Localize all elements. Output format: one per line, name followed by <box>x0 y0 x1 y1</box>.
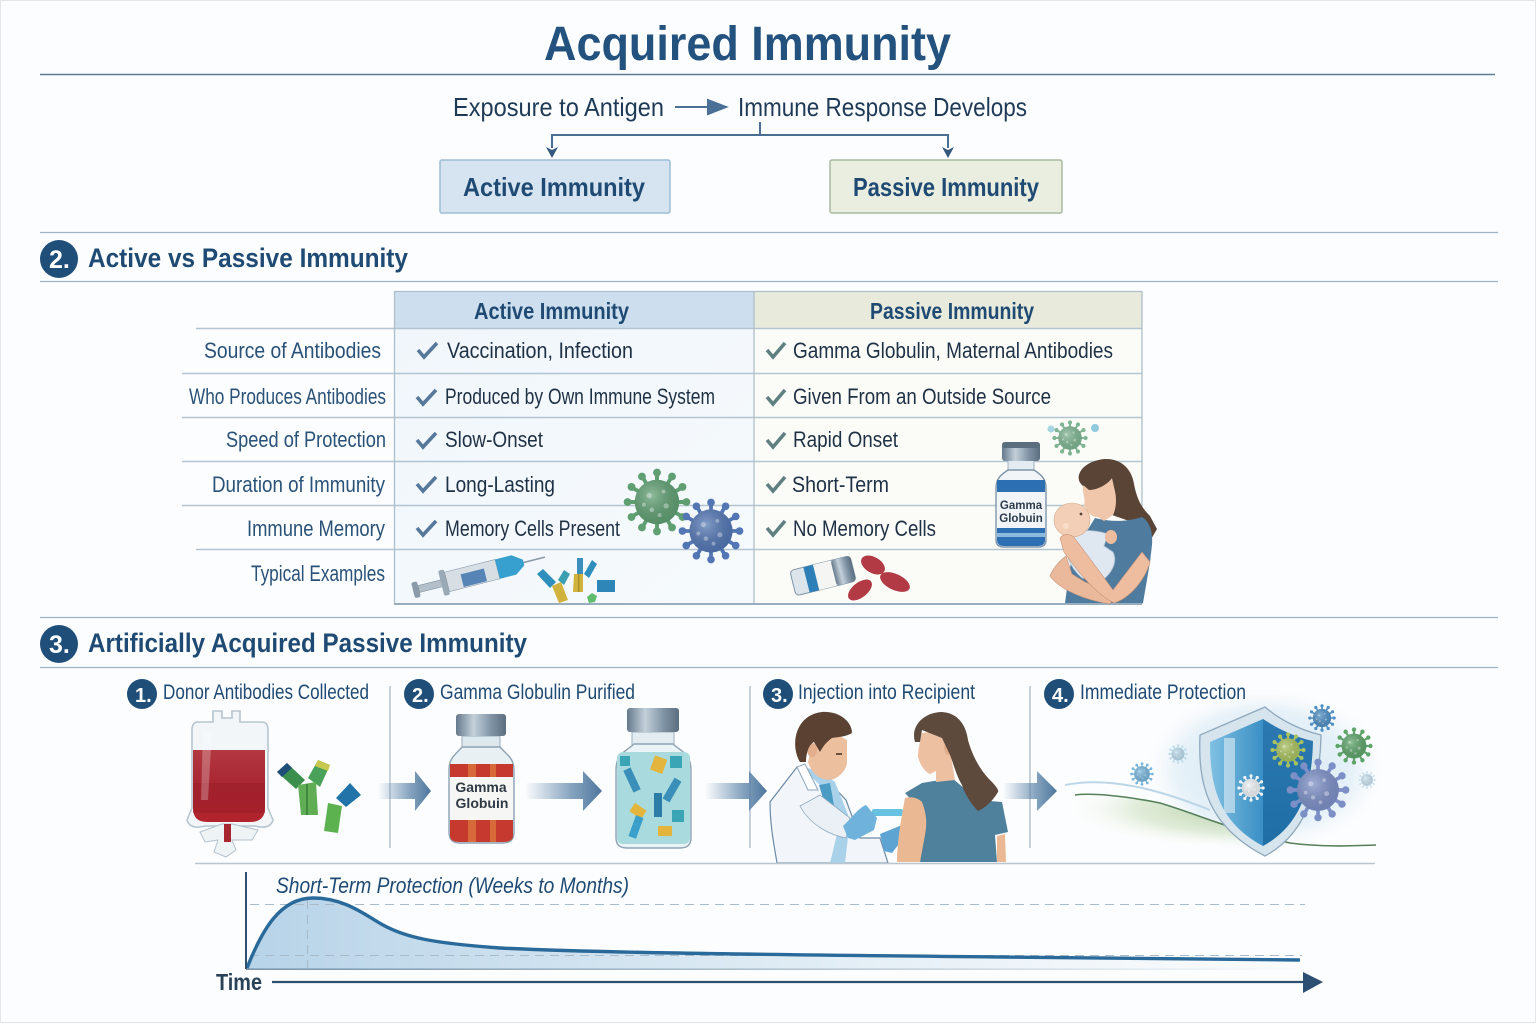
arrow: purified <box>525 771 602 811</box>
row labels <box>189 338 386 586</box>
illustration: recipient woman <box>897 712 1008 862</box>
arrow: step 1 to 2 <box>378 771 431 811</box>
step 3 label: Injection into Recipient <box>798 681 975 704</box>
icon: gamma globulin vial <box>996 442 1046 547</box>
step 2 label: Gamma Globulin Purified <box>440 681 635 704</box>
face <box>1083 477 1116 521</box>
flow: exposure to immune response: Exposure to Antigen <box>453 92 664 122</box>
active immunity cells <box>417 338 715 541</box>
shirt and tie <box>800 766 850 863</box>
row labels: Speed of Protection <box>226 427 386 452</box>
hair back <box>1079 459 1157 541</box>
background cloud <box>1140 685 1390 855</box>
arrow: step 3 to 4 <box>1003 771 1057 811</box>
icon: gamma globulin vial: Globuin <box>999 513 1043 525</box>
active immunity cells: Memory Cells Present <box>445 516 620 541</box>
hair <box>795 712 852 762</box>
head <box>808 732 847 780</box>
icon: gamma globulin bottle: Globuin <box>456 795 508 811</box>
heading: section 2: Active vs Passive Immunity <box>88 243 408 273</box>
icon: purified jar <box>616 708 691 848</box>
passive immunity cells <box>767 338 1113 541</box>
table header: active: Active Immunity <box>474 298 629 324</box>
row labels: Who Produces Antibodies <box>189 384 386 409</box>
hair <box>914 712 998 811</box>
row labels: Typical Examples <box>251 561 385 586</box>
icon: gamma globulin bottle: Gamma <box>455 779 507 795</box>
connector arrows to immunity boxes <box>552 122 948 148</box>
table header: passive: Passive Immunity <box>870 298 1034 324</box>
arrow: exposure to response <box>675 100 726 114</box>
sleeve <box>800 795 850 838</box>
icon: blood bag <box>187 711 273 857</box>
step 3 label: 3. <box>771 685 788 707</box>
step 3 label <box>763 679 975 709</box>
chart label: Short-Term Protection (Weeks to Months) <box>276 873 629 898</box>
shield body <box>1200 707 1321 856</box>
time arrow <box>272 981 1305 983</box>
mother's near arm <box>1060 534 1150 603</box>
illustration: immediate protection shield <box>1062 685 1390 864</box>
heading: section 2: 2. <box>49 246 70 274</box>
active immunity cells: Produced by Own Immune System <box>445 384 715 409</box>
heading: section 2 <box>40 240 408 278</box>
heading: section 3: Artificially Acquired Passive Immunity <box>88 628 527 658</box>
step 1 label: Donor Antibodies Collected <box>163 681 369 704</box>
coat <box>770 767 888 863</box>
passive immunity cells: Gamma Globulin, Maternal Antibodies <box>793 338 1113 363</box>
passive immunity cells: Given From an Outside Source <box>793 384 1051 409</box>
icon: table antibodies <box>537 558 615 603</box>
box: active immunity <box>440 160 670 213</box>
active immunity cells: Slow-Onset <box>445 427 543 452</box>
head and neck <box>918 730 955 782</box>
heading: section 3 <box>40 625 527 663</box>
illustration: doctor giving injection <box>770 712 903 863</box>
arm <box>897 797 926 862</box>
baby head <box>1054 503 1090 537</box>
blanket <box>1066 530 1115 582</box>
icon: red pills <box>844 552 913 605</box>
row labels: Immune Memory <box>247 516 385 541</box>
viruses <box>1308 704 1336 732</box>
active immunity cells: Long-Lasting <box>445 472 555 497</box>
title: Acquired Immunity <box>544 18 951 71</box>
gloves <box>843 805 877 840</box>
passive immunity cells: Short-Term <box>792 472 889 497</box>
icon: pill bottle <box>790 556 856 596</box>
flow: exposure to immune response: Immune Response Develops <box>738 92 1027 122</box>
icon: antibodies, step 1 <box>277 760 361 833</box>
mother's far arm <box>1050 556 1116 604</box>
syringe <box>872 809 903 816</box>
step 2 label: 2. <box>412 685 429 707</box>
icon: blue virus <box>679 499 743 563</box>
icon: syringe <box>410 545 548 603</box>
hill <box>1062 795 1376 864</box>
step 4 label: 4. <box>1052 685 1069 707</box>
illustration: mother and baby <box>1050 459 1157 604</box>
step 1 label: 1. <box>135 685 152 707</box>
time label: Time <box>216 969 262 995</box>
icon: green virus <box>624 469 690 535</box>
icon: gamma globulin bottle <box>449 714 514 843</box>
step 4 label <box>1044 679 1246 709</box>
flow: exposure to immune response <box>453 92 1027 122</box>
row labels: Duration of Immunity <box>212 472 385 497</box>
shirt <box>1065 517 1152 603</box>
passive immunity cells: No Memory Cells <box>793 516 936 541</box>
step 1 label <box>127 679 369 709</box>
box: active immunity: Active Immunity <box>463 172 645 202</box>
chart: short-term protection curve <box>216 872 1323 995</box>
panel: comparison table <box>182 291 1157 605</box>
icon: small green virus <box>1048 420 1099 456</box>
box: passive immunity: Passive Immunity <box>853 172 1039 202</box>
step 4 label: Immediate Protection <box>1080 681 1246 704</box>
box: passive immunity <box>830 160 1062 213</box>
icon: gamma globulin vial: Gamma <box>1000 500 1043 512</box>
passive immunity cells: Rapid Onset <box>793 427 898 452</box>
active immunity cells: Vaccination, Infection <box>447 338 633 363</box>
shirt <box>905 778 1008 862</box>
arrow: step 2 to 3 <box>705 771 767 811</box>
row labels: Source of Antibodies <box>204 338 381 363</box>
step 2 label <box>404 679 635 709</box>
heading: section 3: 3. <box>49 631 70 659</box>
